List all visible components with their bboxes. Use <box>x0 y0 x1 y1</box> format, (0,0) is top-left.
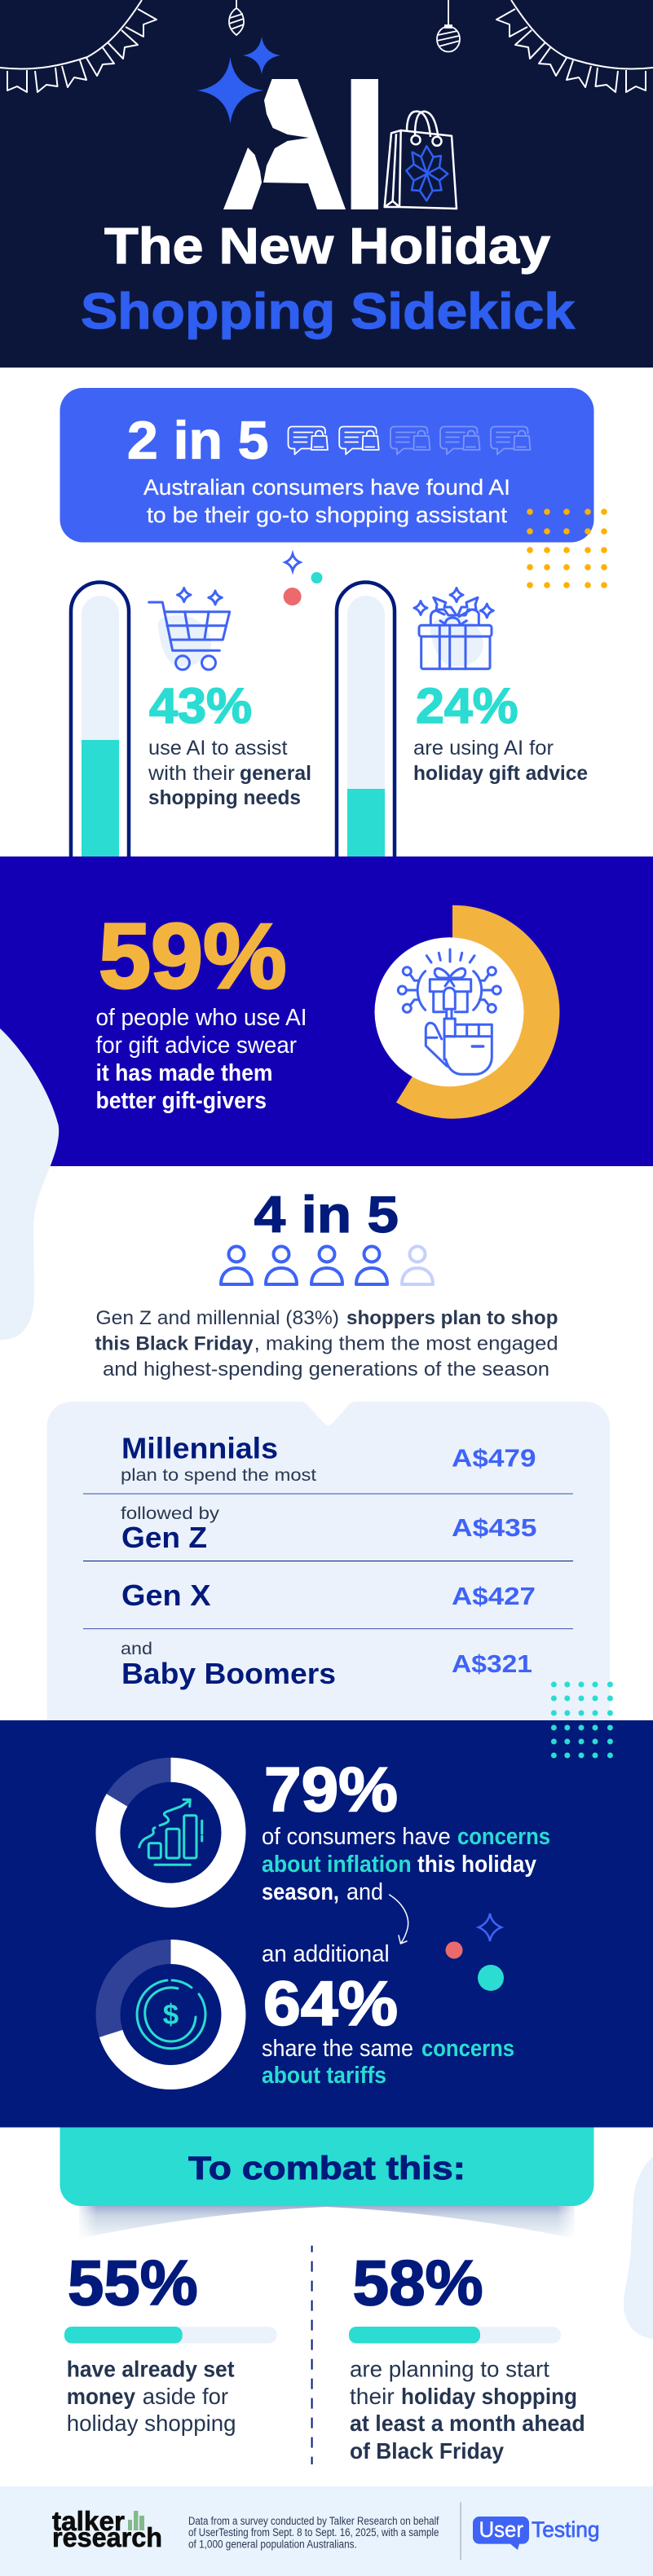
text: 58% description: at least a month ahead <box>350 2411 585 2436</box>
decoration: blob left <box>0 1028 59 1340</box>
row: Millennials: Millennials <box>121 1431 278 1465</box>
logo: UserTesting: Testing <box>532 2517 600 2542</box>
icon: gift box <box>414 588 493 669</box>
text: 79% description: this holiday <box>417 1852 536 1878</box>
text: 55% description: have already set <box>67 2357 235 2382</box>
logo: UserTesting: User <box>479 2517 523 2542</box>
progress bar: 58% <box>349 2327 561 2344</box>
AI logotype <box>223 79 378 209</box>
ornament right <box>437 0 460 52</box>
stat: 79%: 79% <box>264 1755 398 1825</box>
text: 79% description: season, <box>262 1879 339 1905</box>
stat: 58%: 58% <box>353 2247 483 2318</box>
text: 59% description: for gift advice swear <box>96 1033 297 1059</box>
text: 64% description: concerns <box>421 2036 514 2062</box>
text: 79% description <box>262 1824 550 1905</box>
ornament left <box>229 0 244 35</box>
title line 1: The New Holiday <box>104 218 551 275</box>
icon: robot hand and gift <box>398 949 501 1074</box>
text: generations description: shoppers plan to shop <box>346 1307 558 1329</box>
logo: Talker Research <box>52 2506 162 2552</box>
text: 64% description: about tariffs <box>262 2063 386 2089</box>
stat: 4 in 5: 4 in 5 <box>254 1187 399 1244</box>
text: 64% description <box>262 2036 514 2089</box>
donut chart: 79% <box>108 1770 233 1896</box>
icons: chat with bag row <box>289 427 530 455</box>
text: generations description <box>95 1307 558 1380</box>
icon: rising chart <box>139 1799 202 1865</box>
dashed divider <box>311 2246 313 2464</box>
logo: UserTesting <box>473 2517 600 2550</box>
decoration: blob right <box>624 2156 653 2339</box>
row: Millennials <box>121 1431 536 1485</box>
panel: spending card <box>47 1402 610 1720</box>
row: Baby Boomers: A$321 <box>452 1649 532 1678</box>
shadow under heading box <box>79 2206 575 2239</box>
row: Gen X <box>121 1579 536 1612</box>
text: an additional: an additional <box>262 1941 390 1967</box>
row: Gen X: Gen X <box>121 1579 210 1612</box>
row: Baby Boomers <box>121 1640 532 1690</box>
icons: people row <box>221 1247 433 1284</box>
stat: 55%: 55% <box>68 2247 198 2318</box>
text: 43% description: shopping needs <box>148 786 301 809</box>
text: 64% description: share the same <box>262 2036 413 2062</box>
row: Gen Z: followed by <box>121 1504 220 1523</box>
donut chart: 64% <box>108 1952 233 2077</box>
text: 59% description <box>96 1005 307 1114</box>
description: Australian consumers have found AI <box>143 475 510 500</box>
text: 59% description: of people who use AI <box>96 1005 307 1031</box>
text: 59% description: better gift-givers <box>96 1088 267 1114</box>
text: 55% description: money <box>67 2384 135 2409</box>
text: 58% description: their <box>350 2384 395 2409</box>
text: 43% description: with their <box>148 762 235 785</box>
text: generations description: this Black Friday <box>95 1333 254 1354</box>
row: Gen Z: A$435 <box>452 1513 536 1542</box>
text: generations description: Gen Z and millennial (83%) <box>96 1307 339 1329</box>
text: generations description: and highest-spending generations of the season <box>103 1358 549 1380</box>
text: 58% description <box>350 2357 585 2464</box>
stat: 24%: 24% <box>416 678 518 733</box>
donut chart: 59% <box>375 905 559 1119</box>
row: Baby Boomers: and <box>121 1640 152 1658</box>
icon: dollar coin <box>137 1980 205 2049</box>
logo: Talker Research: talker <box>52 2506 125 2536</box>
stat: 59%: 59% <box>99 905 287 1007</box>
progress bar: 55% <box>64 2327 277 2344</box>
panel: concerns <box>0 1720 653 2127</box>
sparkle large <box>197 57 264 124</box>
column: 58% <box>349 2247 585 2464</box>
footer <box>0 2486 653 2576</box>
row: Gen X: A$427 <box>452 1582 536 1610</box>
panel: to combat this heading <box>60 2127 593 2206</box>
bunting left <box>0 0 157 92</box>
description: to be their go-to shopping assistant <box>147 503 508 527</box>
row: Millennials: plan to spend the most <box>121 1466 316 1485</box>
text: 43% description: use AI to assist <box>148 737 288 760</box>
text: 59% description: it has made them <box>96 1060 272 1086</box>
text: generations description: , making them the most engaged <box>254 1333 558 1354</box>
column: 55% <box>64 2247 277 2436</box>
text: 55% description: holiday shopping <box>67 2411 236 2436</box>
thermometer: 43% <box>71 582 129 856</box>
text: 79% description: of consumers have <box>262 1824 451 1850</box>
stat: 2 in 5: 2 in 5 <box>127 411 269 469</box>
icon: shopping cart <box>149 588 230 670</box>
logo: Talker Research: research <box>52 2522 162 2552</box>
row: Gen Z <box>121 1504 536 1554</box>
bunting right <box>496 0 653 92</box>
text: methodology: Data from a survey conducted by Talker Research on behalf <box>188 2515 439 2527</box>
text: 58% description: are planning to start <box>350 2357 549 2382</box>
decoration: sparkle and dots <box>284 554 323 605</box>
decoration: star and dots <box>445 1913 504 1991</box>
icon: shopping bag <box>385 112 457 209</box>
sparkle small <box>243 37 280 74</box>
decoration: yellow dots <box>527 509 607 588</box>
text: 55% description <box>67 2357 236 2436</box>
stat: 64%: 64% <box>263 1969 398 2039</box>
text: 55% description: aside for <box>143 2384 228 2409</box>
description <box>143 475 510 527</box>
row: Gen Z: Gen Z <box>121 1521 207 1554</box>
text: 58% description: of Black Friday <box>350 2438 504 2464</box>
panel: 59% <box>0 856 653 1166</box>
text: 79% description: about inflation <box>262 1852 412 1878</box>
panel: to combat this heading: To combat this: <box>188 2151 465 2186</box>
decoration: teal dots <box>551 1682 613 1759</box>
panel: 2 in 5 <box>60 388 593 543</box>
thermometer: 24% <box>337 582 395 856</box>
text: 43% description <box>148 737 311 809</box>
text: 24% description: are using AI for <box>413 737 554 760</box>
header panel <box>0 0 653 368</box>
text: 79% description: and <box>346 1879 383 1905</box>
text: 58% description: holiday shopping <box>401 2384 577 2409</box>
stat: 43%: 43% <box>149 678 252 733</box>
text: 24% description <box>413 737 588 785</box>
text: methodology: of UserTesting from Sept. 8 to Sept. 16, 2025, with a sample <box>188 2526 439 2539</box>
row: Millennials: A$479 <box>452 1444 536 1472</box>
text: 79% description: concerns <box>457 1824 550 1850</box>
arrow: and to additional <box>390 1895 408 1944</box>
title line 2: Shopping Sidekick <box>81 284 576 340</box>
text: 24% description: holiday gift advice <box>413 762 588 785</box>
text: methodology: of 1,000 general population Australians. <box>188 2539 357 2551</box>
text: methodology <box>188 2515 439 2551</box>
row: Baby Boomers: Baby Boomers <box>121 1657 336 1690</box>
text: 43% description: general <box>240 762 311 785</box>
icon: dollar coin: $ <box>163 1999 179 2031</box>
